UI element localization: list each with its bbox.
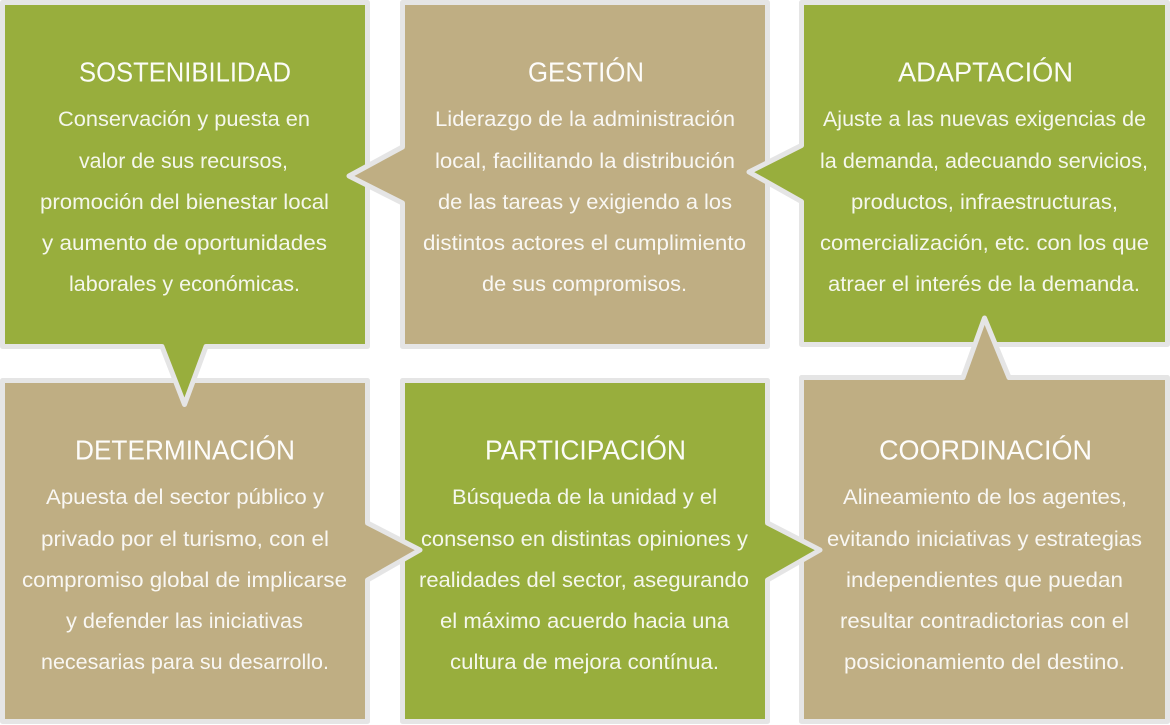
panel shape: participación: [402, 380, 820, 722]
description: coordinación: independientes que puedan: [846, 569, 1123, 592]
description: gestión: [423, 108, 746, 296]
description: participación: el máximo acuerdo hacia una: [440, 610, 729, 633]
description: sostenibilidad: Conservación y puesta en: [58, 108, 310, 131]
heading: sostenibilidad: SOSTENIBILIDAD: [79, 56, 291, 88]
text: participación: [419, 434, 749, 674]
description: sostenibilidad: laborales y económicas.: [69, 273, 300, 296]
text: determinación: [22, 434, 347, 674]
description: participación: Búsqueda de la unidad y el: [452, 486, 717, 509]
description: determinación: [22, 486, 347, 674]
description: gestión: de las tareas y exigiendo a los: [438, 191, 732, 214]
description: gestión: distintos actores el cumplimiento: [423, 232, 746, 255]
description: adaptación: Ajuste a las nuevas exigencias de: [823, 108, 1146, 131]
panel shape: adaptación: [749, 2, 1168, 344]
description: coordinación: posicionamiento del destino.: [844, 651, 1125, 674]
panel shape: determinación: [2, 380, 420, 722]
text: gestión: [423, 56, 746, 296]
text: coordinación: [827, 434, 1142, 674]
description: adaptación: comercialización, etc. con los que: [820, 232, 1149, 255]
description: adaptación: atraer el interés de la demanda.: [828, 273, 1140, 296]
heading: gestión: GESTIÓN: [528, 56, 644, 88]
description: coordinación: evitando iniciativas y estrategias: [827, 528, 1142, 551]
description: sostenibilidad: valor de sus recursos,: [79, 150, 288, 173]
panel shape: adaptación arrow overlap: [749, 146, 804, 202]
description: determinación: compromiso global de implicarse: [22, 569, 347, 592]
heading: adaptación: ADAPTACIÓN: [898, 56, 1073, 88]
heading: determinación: DETERMINACIÓN: [75, 434, 295, 466]
description: sostenibilidad: y aumento de oportunidades: [42, 232, 327, 255]
description: participación: realidades del sector, asegurando: [419, 569, 749, 592]
description: determinación: privado por el turismo, con el: [41, 528, 329, 551]
description: coordinación: [827, 486, 1142, 674]
description: gestión: local, facilitando la distribución: [435, 150, 735, 173]
description: adaptación: la demanda, adecuando servicios,: [820, 150, 1148, 173]
description: adaptación: [820, 108, 1149, 296]
panel shape: sostenibilidad: [2, 2, 368, 404]
panel shape: coordinación: [802, 318, 1168, 722]
description: sostenibilidad: [40, 108, 329, 296]
description: participación: consenso en distintas opiniones y: [421, 528, 749, 551]
description: coordinación: resultar contradictorias con el: [840, 610, 1129, 633]
description: gestión: de sus compromisos.: [482, 273, 687, 296]
description: adaptación: productos, infraestructuras,: [851, 191, 1118, 214]
text: sostenibilidad: [40, 56, 329, 296]
heading: coordinación: COORDINACIÓN: [879, 434, 1092, 466]
description: determinación: y defender las iniciativas: [66, 610, 303, 633]
description: sostenibilidad: promoción del bienestar local: [40, 191, 329, 214]
description: determinación: necesarias para su desarrollo.: [41, 651, 329, 674]
panel shape: gestión: [349, 2, 768, 346]
description: participación: cultura de mejora contínua.: [450, 651, 719, 674]
description: coordinación: Alineamiento de los agentes,: [843, 486, 1127, 509]
description: determinación: Apuesta del sector público y: [46, 486, 325, 509]
description: participación: [419, 486, 749, 674]
description: gestión: Liderazgo de la administración: [435, 108, 735, 131]
text: adaptación: [820, 56, 1149, 296]
heading: participación: PARTICIPACIÓN: [485, 434, 686, 466]
